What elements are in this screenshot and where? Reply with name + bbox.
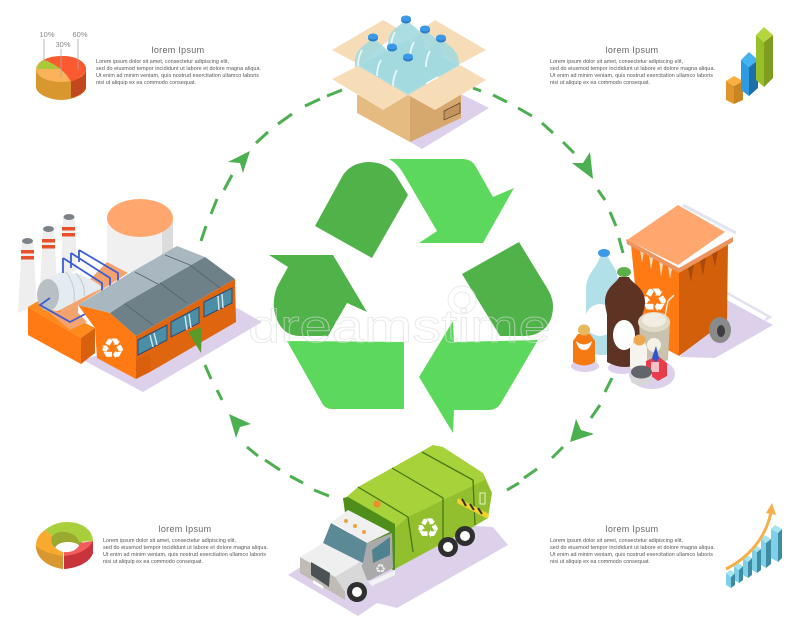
truck front (300, 557, 345, 600)
truck cargo front opening (343, 497, 395, 570)
pie chart (36, 30, 88, 100)
bin right face (679, 243, 728, 356)
truck plate (313, 580, 323, 589)
truck fender (335, 562, 367, 592)
recycling arrow: top light (389, 159, 514, 243)
pie label 10%: 10% (39, 30, 55, 39)
growth chart (726, 503, 782, 588)
truck hood (300, 543, 360, 577)
text block: top right: nisi ut aliquip ex ea commodo consequat. (550, 80, 650, 86)
roof seams (125, 255, 220, 325)
truck tail hazard stripe (457, 498, 489, 519)
donut red segment (64, 541, 93, 569)
factory roof front (110, 257, 235, 336)
recycling icon on cab (376, 564, 385, 573)
central recycling symbol (269, 159, 553, 433)
box opening (360, 40, 458, 93)
growth arrow (726, 503, 776, 569)
dashed cycle ring (201, 88, 623, 496)
box shadow (410, 94, 489, 149)
text block: bottom left: Ut enim ad minim veniam, quis nostrud exercitation ullamco laboris (103, 552, 266, 558)
truck step (368, 570, 395, 586)
blue pipes (40, 250, 118, 322)
factory gable wall (78, 305, 136, 379)
recycling icon on bin (642, 289, 666, 311)
recycling arrow: left dark (269, 255, 367, 336)
text block: top left: Lorem ipsum dolor sit amet, consectetur adipiscing elit, (96, 59, 230, 65)
truck cab roof (332, 510, 390, 543)
bar chart (726, 27, 773, 104)
truck side window (372, 537, 390, 563)
box front flaps (332, 65, 486, 110)
text block: bottom left: lorem Ipsum (159, 524, 211, 534)
arrow: ring bottom left (229, 414, 251, 438)
green bar (756, 27, 773, 87)
text block: bottom left (103, 524, 268, 565)
factory shadow (83, 308, 262, 392)
bottles (355, 16, 459, 96)
red glue bottle (646, 346, 667, 381)
orange block faces (28, 307, 95, 364)
cup with straw (638, 295, 674, 364)
bin left face (631, 245, 679, 356)
truck cargo side (393, 473, 492, 570)
salmon inset on block (40, 305, 87, 330)
bin rear strip (727, 293, 770, 320)
text block: top right: sed do eiusmod tempor incididunt ut labore et dolore magna aliqua. (550, 66, 715, 72)
truck stripes (358, 452, 475, 552)
recycling arrow: lower right light (419, 321, 538, 433)
donut green segment (45, 522, 93, 542)
factory windows (138, 288, 232, 355)
text block: bottom left: nisi ut aliquip ex ea commodo consequat. (103, 559, 203, 565)
recycling segment: right dark (462, 242, 553, 336)
bin lid edge (626, 237, 733, 273)
orange bottle (573, 324, 595, 366)
arrow: ring top right (572, 152, 593, 179)
truck beacon (374, 500, 380, 508)
arrow: ring top left (228, 151, 250, 173)
text block: top right: Ut enim ad minim veniam, quis nostrud exercitation ullamco laboris (550, 73, 713, 79)
bin wheel (709, 317, 731, 343)
bin handle (683, 205, 736, 233)
blue bar (741, 52, 758, 96)
truck windshield (323, 523, 367, 563)
storage tank (107, 199, 173, 272)
text block: top left: sed do eiusmod tempor incididunt ut labore et dolore magna aliqua. (96, 66, 261, 72)
pie label 60%: 60% (72, 30, 88, 39)
bin drips (640, 250, 672, 279)
text block: top right (550, 45, 715, 86)
white bottle (630, 334, 647, 371)
text block: top left: lorem Ipsum (152, 45, 204, 55)
watermark: dreamstime (248, 302, 551, 353)
box handling label (444, 103, 460, 120)
bin shadow (680, 300, 773, 358)
recycling icon on factory (102, 338, 123, 359)
growth bars (726, 525, 782, 588)
text block: top right: Lorem ipsum dolor sit amet, consectetur adipiscing elit, (550, 59, 684, 65)
bin lid (627, 205, 725, 265)
text block: top right: lorem Ipsum (606, 45, 658, 55)
truck grille (311, 562, 330, 587)
brown bottle (605, 267, 645, 367)
illustration: box of plastic bottles (332, 16, 489, 149)
truck rear detail (480, 493, 485, 504)
text block: top left (96, 45, 261, 86)
text block: top left: nisi ut aliquip ex ea commodo consequat. (96, 80, 196, 86)
arrow: ring bottom right (570, 419, 594, 442)
donut orange segment (36, 530, 63, 569)
text block: bottom right (550, 524, 715, 565)
factory roof back (78, 246, 205, 313)
text block: bottom right: lorem Ipsum (606, 524, 658, 534)
cab roof lights (344, 519, 366, 534)
box faces (357, 95, 461, 142)
salmon platform strip (58, 262, 128, 312)
illustration: recycling factory (18, 199, 262, 392)
truck cab side (355, 533, 393, 580)
text block: bottom right: Ut enim ad minim veniam, quis nostrud exercitation ullamco laboris (550, 552, 713, 558)
pie label 30%: 30% (55, 40, 71, 49)
text block: bottom left: Lorem ipsum dolor sit amet, consectetur adipiscing elit, (103, 538, 236, 544)
truck wheels (347, 526, 475, 602)
illustration: garbage truck (288, 445, 508, 616)
donut chart (36, 522, 93, 569)
text block: bottom right: Lorem ipsum dolor sit amet, consectetur adipiscing elit, (550, 538, 684, 544)
box back flaps (332, 20, 486, 65)
recycling segment: top dark (315, 162, 408, 258)
donut inner wall (50, 530, 82, 554)
orange bar (726, 76, 743, 104)
truck cargo top (343, 445, 485, 528)
orange block top (28, 300, 95, 338)
text block: bottom right: sed do eiusmod tempor incididunt ut labore et dolore magna aliqua. (550, 545, 715, 551)
factory side wall (136, 279, 236, 379)
chimneys (18, 214, 77, 313)
recycling icon on truck (418, 518, 438, 538)
horizontal cylinder (37, 272, 103, 311)
truck shadow (288, 520, 508, 616)
bottle shadows (571, 359, 675, 389)
illustration: waste bin with bottles (571, 205, 773, 389)
text block: top left: Ut enim ad minim veniam, quis nostrud exercitation ullamco laboris (96, 73, 259, 79)
recycling segment: lower left light (287, 341, 404, 409)
arrow: ring left over factory (188, 327, 202, 353)
text block: bottom left: sed do eiusmod tempor incididunt ut labore et dolore magna aliqua. (103, 545, 268, 551)
clear blue bottle (585, 249, 618, 355)
grey jar (631, 366, 652, 385)
text block: bottom right: nisi ut aliquip ex ea commodo consequat. (550, 559, 650, 565)
